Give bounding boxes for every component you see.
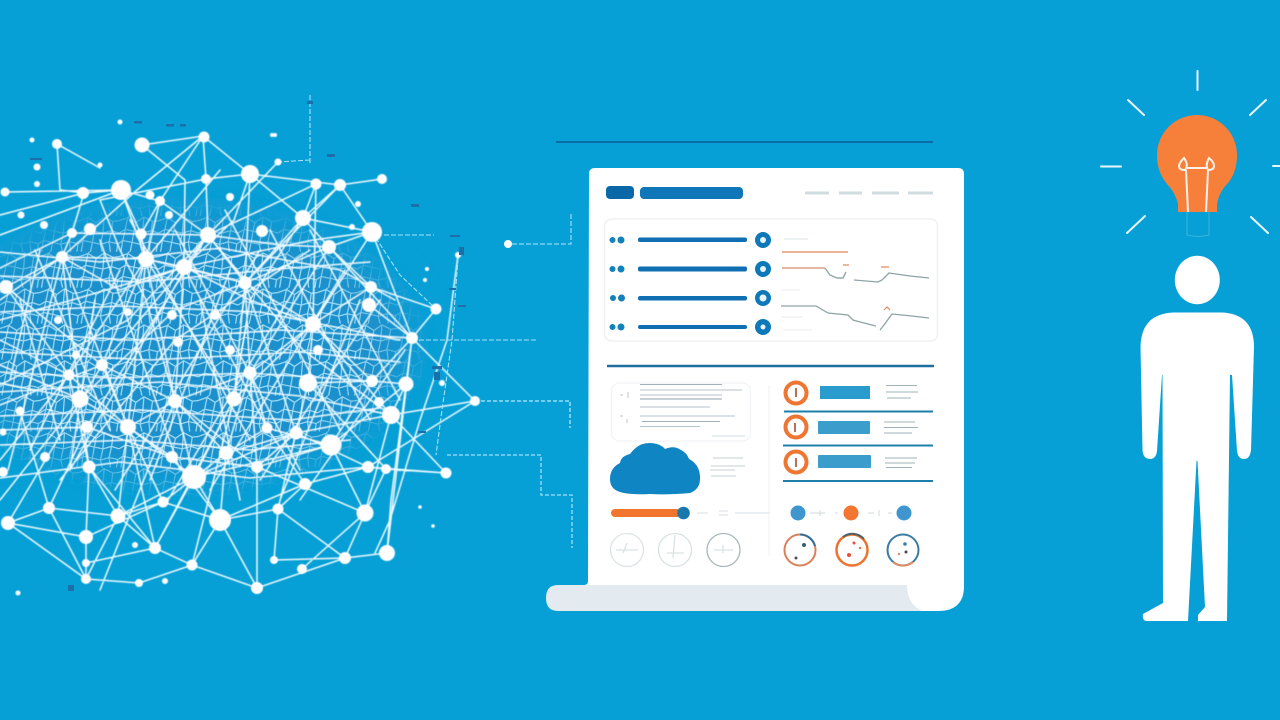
vertical panel divider [768, 385, 770, 556]
metric rows [610, 232, 771, 335]
section divider [607, 365, 934, 367]
data connector: middle dotted line [481, 401, 570, 428]
bulb body [1157, 115, 1237, 212]
bulb socket outline [1187, 212, 1209, 236]
top rule above report [556, 141, 933, 143]
filament [1179, 158, 1214, 212]
metrics panel [604, 219, 938, 341]
person figure [1140, 256, 1254, 621]
head [1175, 256, 1220, 304]
paper sheet [560, 168, 964, 611]
line charts [781, 239, 929, 330]
note card with text lines [612, 383, 750, 441]
cloud icon [610, 443, 700, 494]
paper bottom scroll [546, 585, 922, 611]
data connector: lower stepped dotted line [447, 455, 572, 548]
status dots [790, 506, 912, 520]
network cloud of connected nodes [0, 95, 538, 596]
illustration canvas [0, 70, 1280, 621]
progress slider [611, 507, 770, 519]
cloud caption [710, 458, 745, 476]
body [1140, 312, 1254, 621]
report document [546, 168, 964, 611]
gauges: light [610, 534, 740, 566]
summary rows [783, 382, 933, 481]
report header [606, 186, 933, 199]
insight lightbulb [1101, 71, 1280, 236]
gauges: coloured [784, 534, 918, 566]
rays [1101, 71, 1280, 233]
data connector: upper dotted line [504, 212, 571, 248]
